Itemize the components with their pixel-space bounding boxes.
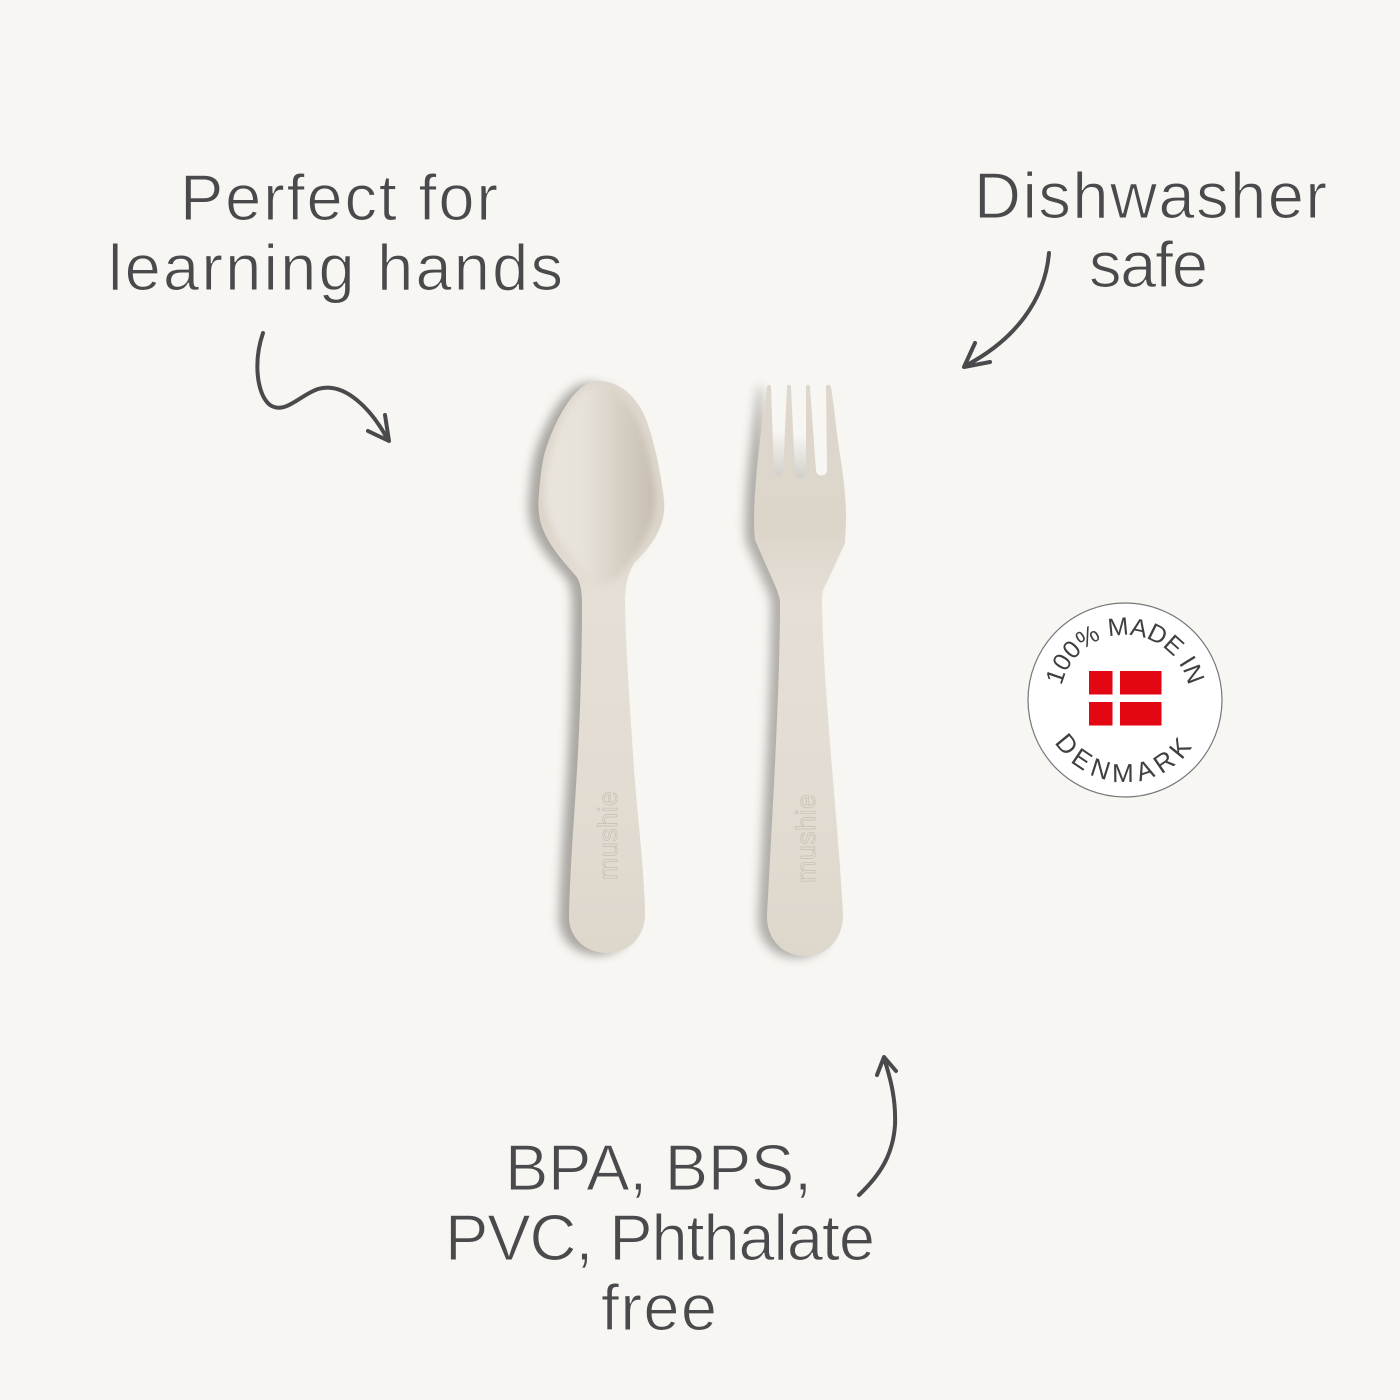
arrow: free-from claims up to cutlery xyxy=(859,1057,896,1195)
fork shadow xyxy=(745,387,837,958)
fork xyxy=(745,385,846,958)
text: BPA, BPS, PVC, Phthalate free: BPA, BPS, xyxy=(505,1131,812,1204)
spoon bowl hollow xyxy=(545,386,655,582)
spoon logo: mushie xyxy=(593,790,623,880)
spoon body xyxy=(538,381,664,953)
badge curved text: DENMARK xyxy=(1055,733,1192,782)
text: BPA, BPS, PVC, Phthalate free: free xyxy=(601,1271,717,1344)
text: perfect for learning hands: learning hands xyxy=(108,231,563,304)
badge curved text: 100% MADE IN xyxy=(1047,617,1204,684)
badge: 100% made in Denmark xyxy=(1027,602,1223,798)
spoon xyxy=(528,381,664,955)
text: perfect for learning hands xyxy=(108,161,563,304)
arrow: learning hands to spoon xyxy=(257,333,389,441)
badge circle xyxy=(1028,603,1222,797)
badge curved text xyxy=(1047,617,1204,782)
text: dishwasher safe: Dishwasher xyxy=(974,159,1327,232)
icon: Danish flag xyxy=(1089,671,1162,726)
infographic canvas xyxy=(112,172,1326,1330)
text: BPA, BPS, PVC, Phthalate free xyxy=(445,1131,875,1344)
text: perfect for learning hands: Perfect for xyxy=(180,161,498,234)
spoon shadow xyxy=(528,383,654,955)
text: dishwasher safe: safe xyxy=(1089,228,1208,301)
fork body xyxy=(754,385,846,956)
arrow: dishwasher safe to fork xyxy=(964,253,1049,367)
text: BPA, BPS, PVC, Phthalate free: PVC, Phthalate xyxy=(445,1201,875,1274)
fork logo: mushie xyxy=(791,793,821,883)
fork slot shading xyxy=(772,430,807,479)
text: dishwasher safe xyxy=(974,159,1327,301)
